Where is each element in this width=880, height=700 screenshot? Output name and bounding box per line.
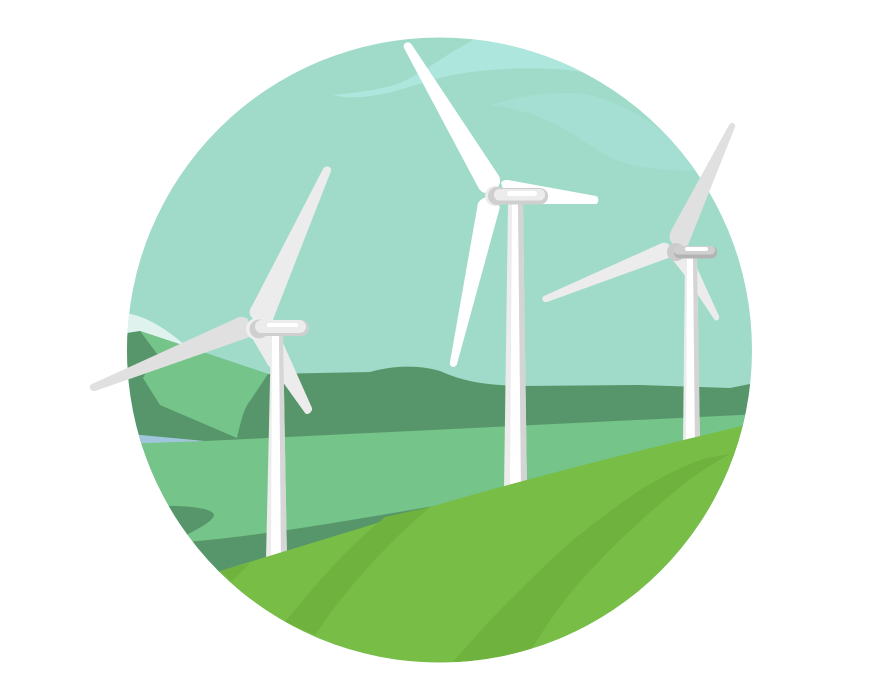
right turbine blades and nacelle [542,123,735,302]
hill furrow small [220,564,249,580]
middle turbine lower blade [450,197,500,367]
right turbine lower blade [672,256,719,320]
middle turbine nacelle [485,186,548,206]
right turbine upper blade [670,123,735,250]
cloud: top wisp [334,39,582,98]
left turbine blades and nacelle [90,167,331,391]
middle turbine right blade [501,180,598,204]
left turbine upper blade [250,167,331,326]
light green mountain face [140,331,268,438]
left turbine left blade [90,317,251,391]
cloud: right wisp [491,93,710,172]
right turbine nacelle [667,243,717,261]
left turbine lower blade [252,336,312,414]
lake [139,434,204,445]
left turbine nacelle [246,318,309,340]
left turbine tower [266,335,287,560]
hill furrow left [285,507,430,635]
hill furrow right [453,454,730,670]
light green field [120,414,760,600]
snow cap on far mountain [128,314,182,344]
right turbine left blade [542,243,671,302]
dark field patch left [168,506,214,534]
illustration: wind turbines in a circular landscape [90,38,752,662]
green hill foreground [220,426,743,662]
dark green distant hills [120,331,760,450]
dark field strip lower [192,506,433,594]
sky [120,30,760,670]
circular landscape scene [120,30,770,680]
right turbine tower [683,258,700,445]
middle turbine blades and nacelle [404,42,598,367]
middle turbine tower [504,204,527,490]
middle turbine upper blade [404,42,500,193]
